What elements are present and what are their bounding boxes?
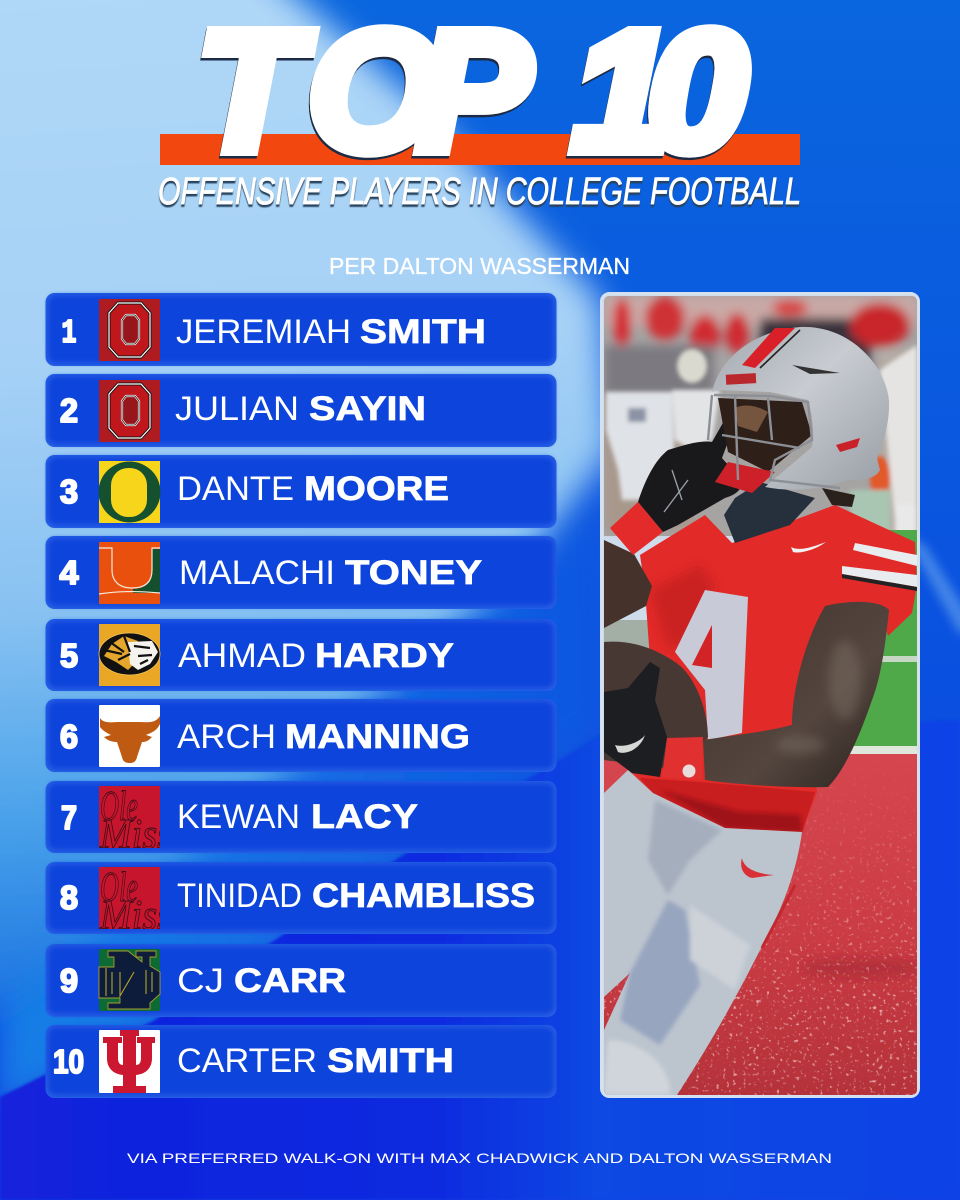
logo: Ole Miss: Ole <box>100 865 138 911</box>
collar <box>724 482 815 543</box>
row 8: Tinidad Chambliss: TINIDAD <box>177 877 302 915</box>
row 1: Jeremiah Smith: JEREMIAH <box>176 313 351 351</box>
logo: Indiana <box>99 1030 160 1093</box>
left arm <box>604 540 652 628</box>
row 7: Kewan Lacy: KEWAN <box>177 798 300 836</box>
logo: Ohio State <box>99 299 160 361</box>
row 3: Dante Moore: DANTE <box>177 470 294 508</box>
sleeve cuff <box>610 502 663 555</box>
row 7: Kewan Lacy <box>46 781 556 858</box>
row 2: Julian Sayin: JULIAN <box>175 390 299 428</box>
right arm <box>703 602 889 787</box>
row 4: Malachi Toney <box>46 536 556 609</box>
source line: per Dalton Wasserman: PER DALTON WASSERMAN <box>329 253 630 279</box>
field <box>854 530 917 746</box>
logo: Texas longhorn <box>99 705 160 767</box>
footer credit: VIA PREFERRED WALK-ON WITH MAX CHADWICK AND DALTON WASSERMAN <box>127 1150 832 1166</box>
jersey <box>630 505 917 832</box>
row 6: Arch Manning: 6 <box>60 718 78 755</box>
logo: Ole Miss <box>99 786 160 848</box>
orange title bar <box>160 134 800 165</box>
row 2: Julian Sayin: SAYIN <box>309 390 426 428</box>
logo: Ole Miss <box>99 867 160 929</box>
logo: Ole Miss: Miss <box>99 812 172 858</box>
row 6: Arch Manning: MANNING <box>285 718 470 756</box>
logo: Notre Dame <box>99 949 160 1011</box>
pants swoosh <box>741 858 774 878</box>
row 8: Tinidad Chambliss: 8 <box>60 879 78 916</box>
row 2: Julian Sayin <box>46 374 556 447</box>
logo: Ole Miss: Ole <box>100 784 138 830</box>
row 4: Malachi Toney: 4 <box>60 554 79 591</box>
row 7: Kewan Lacy: 7 <box>61 799 77 836</box>
sleeve stripes <box>853 543 917 566</box>
lower glove <box>604 662 667 777</box>
row 9: CJ Carr <box>46 944 556 1017</box>
row 3: Dante Moore <box>46 455 556 528</box>
face <box>718 398 812 472</box>
mouthguard <box>715 462 775 493</box>
row 10: Carter Smith: SMITH <box>327 1042 454 1080</box>
row 4: Malachi Toney: TONEY <box>345 554 482 592</box>
row 10: Carter Smith: CARTER <box>177 1042 317 1080</box>
ranking list <box>46 293 556 1098</box>
row 5: Ahmad Hardy: AHMAD <box>178 637 306 675</box>
row 1: Jeremiah Smith: SMITH <box>360 313 486 351</box>
row 5: Ahmad Hardy <box>46 619 556 691</box>
row 8: Tinidad Chambliss <box>46 862 556 939</box>
row 8: Tinidad Chambliss: CHAMBLISS <box>312 877 535 915</box>
facemask <box>708 395 840 488</box>
row 2: Julian Sayin: 2 <box>60 392 78 429</box>
row 9: CJ Carr: CJ <box>177 962 224 1000</box>
row 3: Dante Moore: 3 <box>60 473 78 510</box>
photo panel: Ohio State receiver <box>602 294 920 1096</box>
row 5: Ahmad Hardy: HARDY <box>315 637 454 675</box>
pants <box>604 770 802 1095</box>
logo: Missouri tiger <box>99 624 160 686</box>
row 4: Malachi Toney: MALACHI <box>179 554 335 592</box>
logo: Oregon <box>98 461 160 523</box>
row 9: CJ Carr: 9 <box>60 962 78 999</box>
row 3: Dante Moore: MOORE <box>304 470 449 508</box>
row 9: CJ Carr: CARR <box>234 962 346 1000</box>
row 1: Jeremiah Smith: 1 <box>62 315 76 352</box>
jersey number 4 <box>675 590 748 740</box>
logo: Ole Miss: Miss <box>99 893 172 939</box>
logo: Miami <box>99 542 160 604</box>
row 1: Jeremiah Smith <box>46 293 556 366</box>
row 7: Kewan Lacy: LACY <box>311 798 418 836</box>
title: TOP 10: 10 <box>572 0 747 186</box>
row 6: Arch Manning <box>46 699 556 772</box>
title: TOP 10 <box>197 0 747 186</box>
row 10: Carter Smith: 10 <box>53 1043 84 1080</box>
nike swoosh <box>791 542 826 553</box>
row 6: Arch Manning: ARCH <box>177 718 276 756</box>
logo: Ohio State <box>99 380 160 442</box>
wristband <box>663 737 703 770</box>
turf <box>604 752 917 1095</box>
helmet <box>712 327 889 490</box>
football <box>604 642 708 770</box>
raised glove <box>638 423 740 532</box>
row 10: Carter Smith <box>46 1025 556 1098</box>
row 5: Ahmad Hardy: 5 <box>60 637 78 674</box>
title: TOP 10: TOP <box>197 0 531 186</box>
